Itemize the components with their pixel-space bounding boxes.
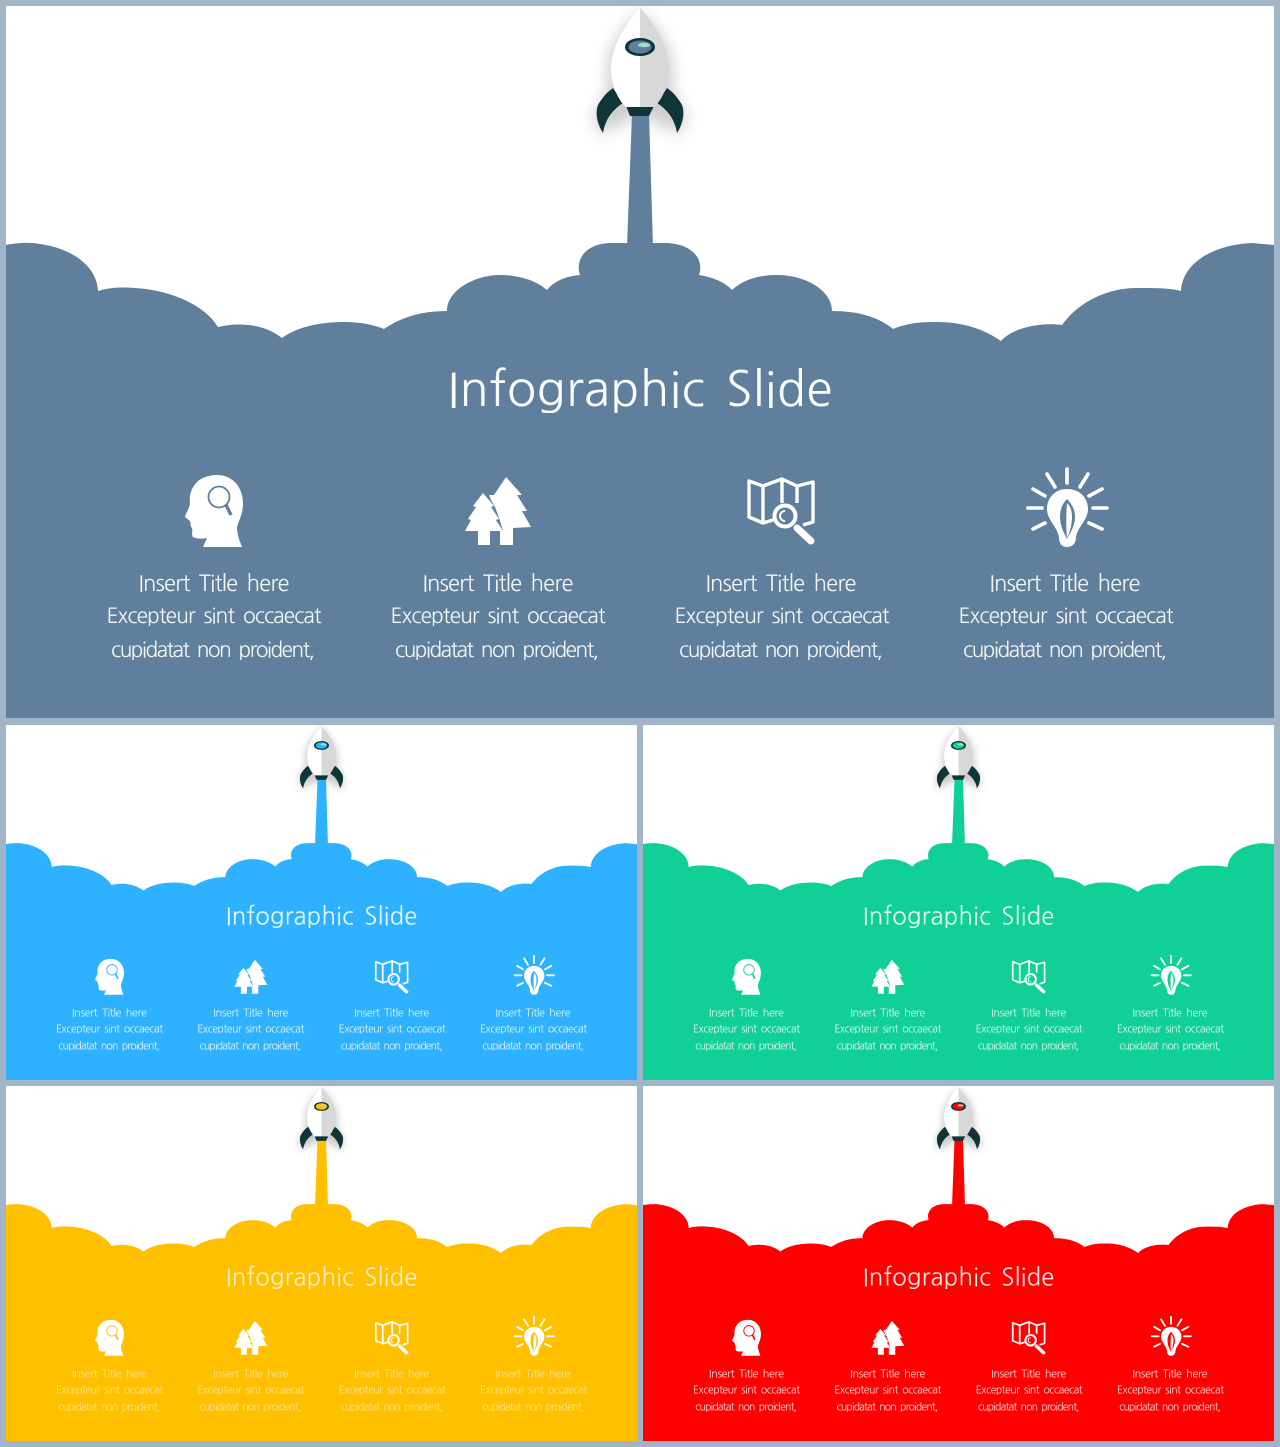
item: map: Insert Title here [991, 1008, 1066, 1019]
item: map: Excepteur sint occaecat [674, 606, 890, 627]
item: bulb [480, 1317, 587, 1413]
item: map: Excepteur sint occaecat [976, 1024, 1083, 1035]
icon: rocket [594, 8, 686, 246]
panel: blue slide [6, 725, 637, 1080]
item: head: cupidatat non proident, [58, 1402, 160, 1413]
item: bulb: Insert Title here [1132, 1369, 1208, 1380]
item: trees: Insert Title here [213, 1008, 288, 1019]
item: trees: cupidatat non proident, [200, 1041, 301, 1052]
item: bulb: Excepteur sint occaecat [1117, 1385, 1224, 1396]
panel: main slate slide [6, 6, 1274, 718]
item: map: Excepteur sint occaecat [339, 1024, 446, 1035]
item: map: Insert Title here [354, 1008, 429, 1019]
item: bulb [1117, 956, 1224, 1052]
title: Infographic Slide [863, 1266, 1054, 1289]
item: map: Insert Title here [991, 1369, 1066, 1380]
panel: green slide [643, 725, 1274, 1080]
item: trees: Insert Title here [422, 573, 574, 595]
item: bulb: Excepteur sint occaecat [480, 1024, 587, 1035]
item: bulb: cupidatat non proident, [1119, 1041, 1221, 1052]
item: bulb [1117, 1317, 1224, 1413]
item: trees [834, 960, 942, 1052]
cloud [643, 843, 1274, 1080]
item: head [56, 1320, 163, 1413]
item: head: cupidatat non proident, [695, 1041, 797, 1052]
panel: yellow slide [6, 1086, 637, 1441]
item: map: Insert Title here [706, 573, 856, 595]
item: map: cupidatat non proident, [978, 1402, 1079, 1413]
item: head: Excepteur sint occaecat [693, 1385, 800, 1396]
item: map: Excepteur sint occaecat [339, 1385, 446, 1396]
item: head: Excepteur sint occaecat [106, 606, 322, 627]
item: head: cupidatat non proident, [111, 640, 315, 661]
item: map [674, 479, 890, 661]
item: head [693, 1320, 800, 1413]
item: map [976, 961, 1083, 1052]
item: trees: Excepteur sint occaecat [197, 1024, 305, 1035]
item: head: Insert Title here [709, 1369, 784, 1380]
item: trees: Excepteur sint occaecat [834, 1024, 942, 1035]
item: bulb: Insert Title here [990, 573, 1140, 595]
item: trees: Insert Title here [850, 1008, 925, 1019]
item: head: Excepteur sint occaecat [56, 1024, 163, 1035]
item: bulb: cupidatat non proident, [963, 640, 1167, 661]
title: Infographic Slide [863, 905, 1054, 928]
item: bulb: Excepteur sint occaecat [958, 606, 1174, 627]
item: trees [834, 1321, 942, 1413]
item: map: cupidatat non proident, [341, 1041, 442, 1052]
title: Infographic Slide [448, 365, 832, 413]
item: head [56, 959, 163, 1052]
item: map [339, 961, 446, 1052]
item: head [693, 959, 800, 1052]
item: bulb: Insert Title here [495, 1369, 571, 1380]
icon: rocket [299, 1087, 344, 1206]
item: bulb: cupidatat non proident, [482, 1041, 584, 1052]
item: head: Excepteur sint occaecat [693, 1024, 800, 1035]
item: trees: Insert Title here [850, 1369, 925, 1380]
icon: rocket [936, 726, 981, 845]
item: bulb: cupidatat non proident, [1119, 1402, 1221, 1413]
item: bulb [958, 469, 1174, 661]
item: map: cupidatat non proident, [679, 640, 883, 661]
item: bulb: Insert Title here [495, 1008, 571, 1019]
title: Infographic Slide [226, 1266, 417, 1289]
item: head [106, 475, 322, 661]
cloud [6, 843, 637, 1080]
item: head: Insert Title here [709, 1008, 784, 1019]
item: trees [390, 477, 606, 661]
item: trees: Excepteur sint occaecat [834, 1385, 942, 1396]
cloud [6, 243, 1274, 718]
item: trees [197, 1321, 305, 1413]
item: bulb: cupidatat non proident, [482, 1402, 584, 1413]
icon: rocket [936, 1087, 981, 1206]
item: head: cupidatat non proident, [695, 1402, 797, 1413]
item: bulb: Insert Title here [1132, 1008, 1208, 1019]
cloud [6, 1204, 637, 1441]
item: trees: cupidatat non proident, [837, 1402, 938, 1413]
item: trees: Excepteur sint occaecat [390, 606, 606, 627]
item: trees [197, 960, 305, 1052]
item: map: cupidatat non proident, [341, 1402, 442, 1413]
item: map [339, 1322, 446, 1413]
item: bulb: Excepteur sint occaecat [1117, 1024, 1224, 1035]
item: head: Insert Title here [138, 573, 290, 595]
item: head: Excepteur sint occaecat [56, 1385, 163, 1396]
item: map: Insert Title here [354, 1369, 429, 1380]
item: trees: cupidatat non proident, [395, 640, 599, 661]
item: trees: cupidatat non proident, [837, 1041, 938, 1052]
item: head: Insert Title here [72, 1008, 147, 1019]
item: head: Insert Title here [72, 1369, 147, 1380]
item: trees: cupidatat non proident, [200, 1402, 301, 1413]
title: Infographic Slide [226, 905, 417, 928]
icon: rocket [299, 726, 344, 845]
panel: red slide [643, 1086, 1274, 1441]
item: head: cupidatat non proident, [58, 1041, 160, 1052]
item: map: Excepteur sint occaecat [976, 1385, 1083, 1396]
item: trees: Insert Title here [213, 1369, 288, 1380]
item: map: cupidatat non proident, [978, 1041, 1079, 1052]
item: map [976, 1322, 1083, 1413]
cloud [643, 1204, 1274, 1441]
item: bulb: Excepteur sint occaecat [480, 1385, 587, 1396]
item: trees: Excepteur sint occaecat [197, 1385, 305, 1396]
item: bulb [480, 956, 587, 1052]
